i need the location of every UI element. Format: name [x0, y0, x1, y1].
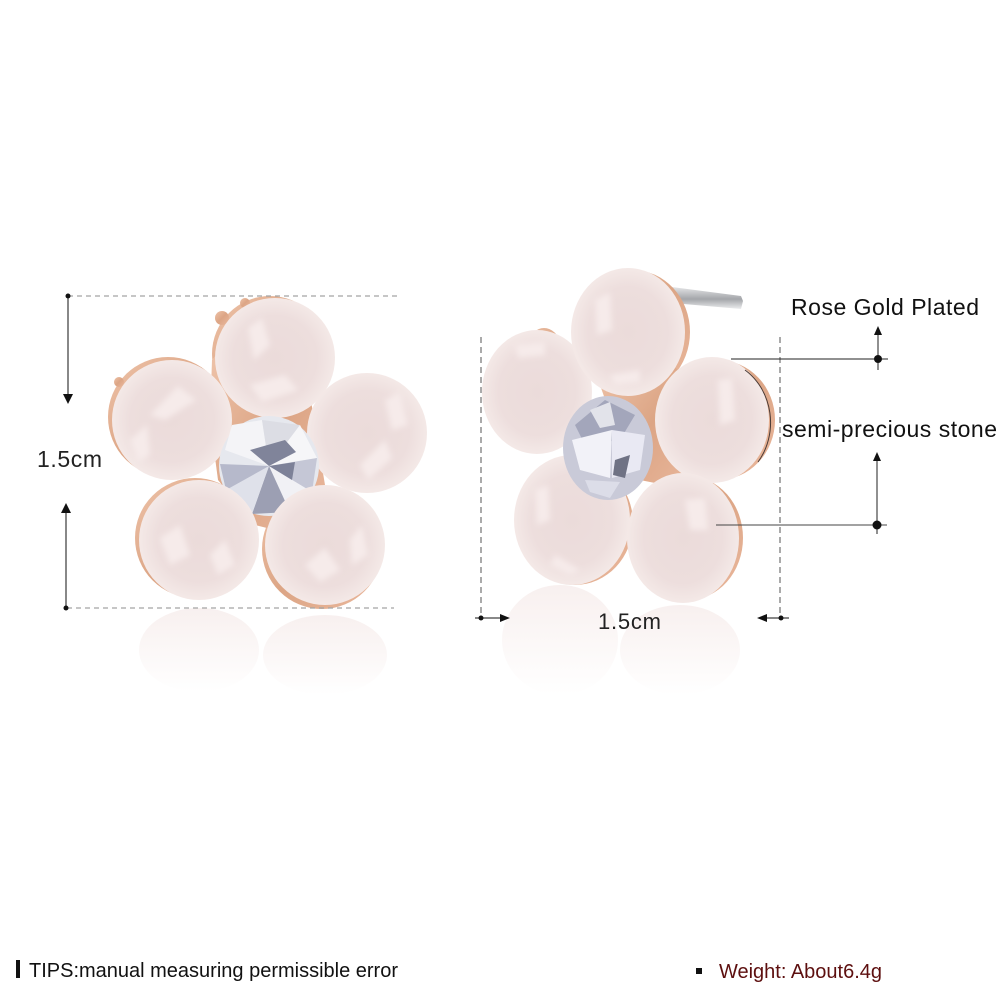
right earring steel post [672, 287, 743, 309]
left earring rose gold setting [108, 296, 382, 609]
left earring crystal [219, 416, 319, 516]
callout: semi-precious stone [716, 416, 997, 534]
left height dimension [37, 294, 397, 610]
left earring stone highlights [130, 318, 408, 480]
right earring rose gold setting [516, 270, 775, 600]
left earring opal stones [112, 298, 427, 493]
right earring left and lower-left stones [482, 330, 630, 585]
callout: semi-precious stone: semi-precious stone [782, 416, 997, 442]
callout: rose gold plated: Rose Gold Plated [791, 294, 979, 320]
right earring reflection [502, 585, 740, 695]
right earring right and lower-right stones [627, 357, 769, 603]
right earring metal rim [745, 370, 771, 462]
dashed guide top [68, 295, 397, 297]
right earring angled view [482, 268, 775, 695]
left earring front view [108, 296, 427, 695]
left earring lower stones [139, 480, 385, 605]
right width dimension [475, 337, 789, 634]
footer weight: Weight: About6.4g [719, 961, 882, 983]
down arrow [63, 294, 73, 404]
callout: rose gold plated [731, 294, 979, 370]
up arrow [61, 503, 71, 610]
right-pointing arrow [475, 614, 510, 622]
leader line [716, 452, 887, 534]
left earring lower highlights [160, 525, 368, 582]
right earring top stone [571, 268, 685, 396]
leader line [731, 326, 888, 370]
right earring stone highlights [515, 292, 735, 575]
width label: 1.5cm [598, 609, 661, 634]
dashed guide left [480, 337, 482, 615]
right earring crystal [563, 396, 653, 500]
height label: 1.5cm [37, 446, 102, 472]
left-pointing arrow [757, 614, 789, 622]
dashed guide right [779, 337, 781, 615]
footer tips: TIPS:manual measuring permissible error [29, 960, 398, 982]
left earring reflection [139, 608, 387, 695]
dashed guide bottom [67, 607, 394, 609]
